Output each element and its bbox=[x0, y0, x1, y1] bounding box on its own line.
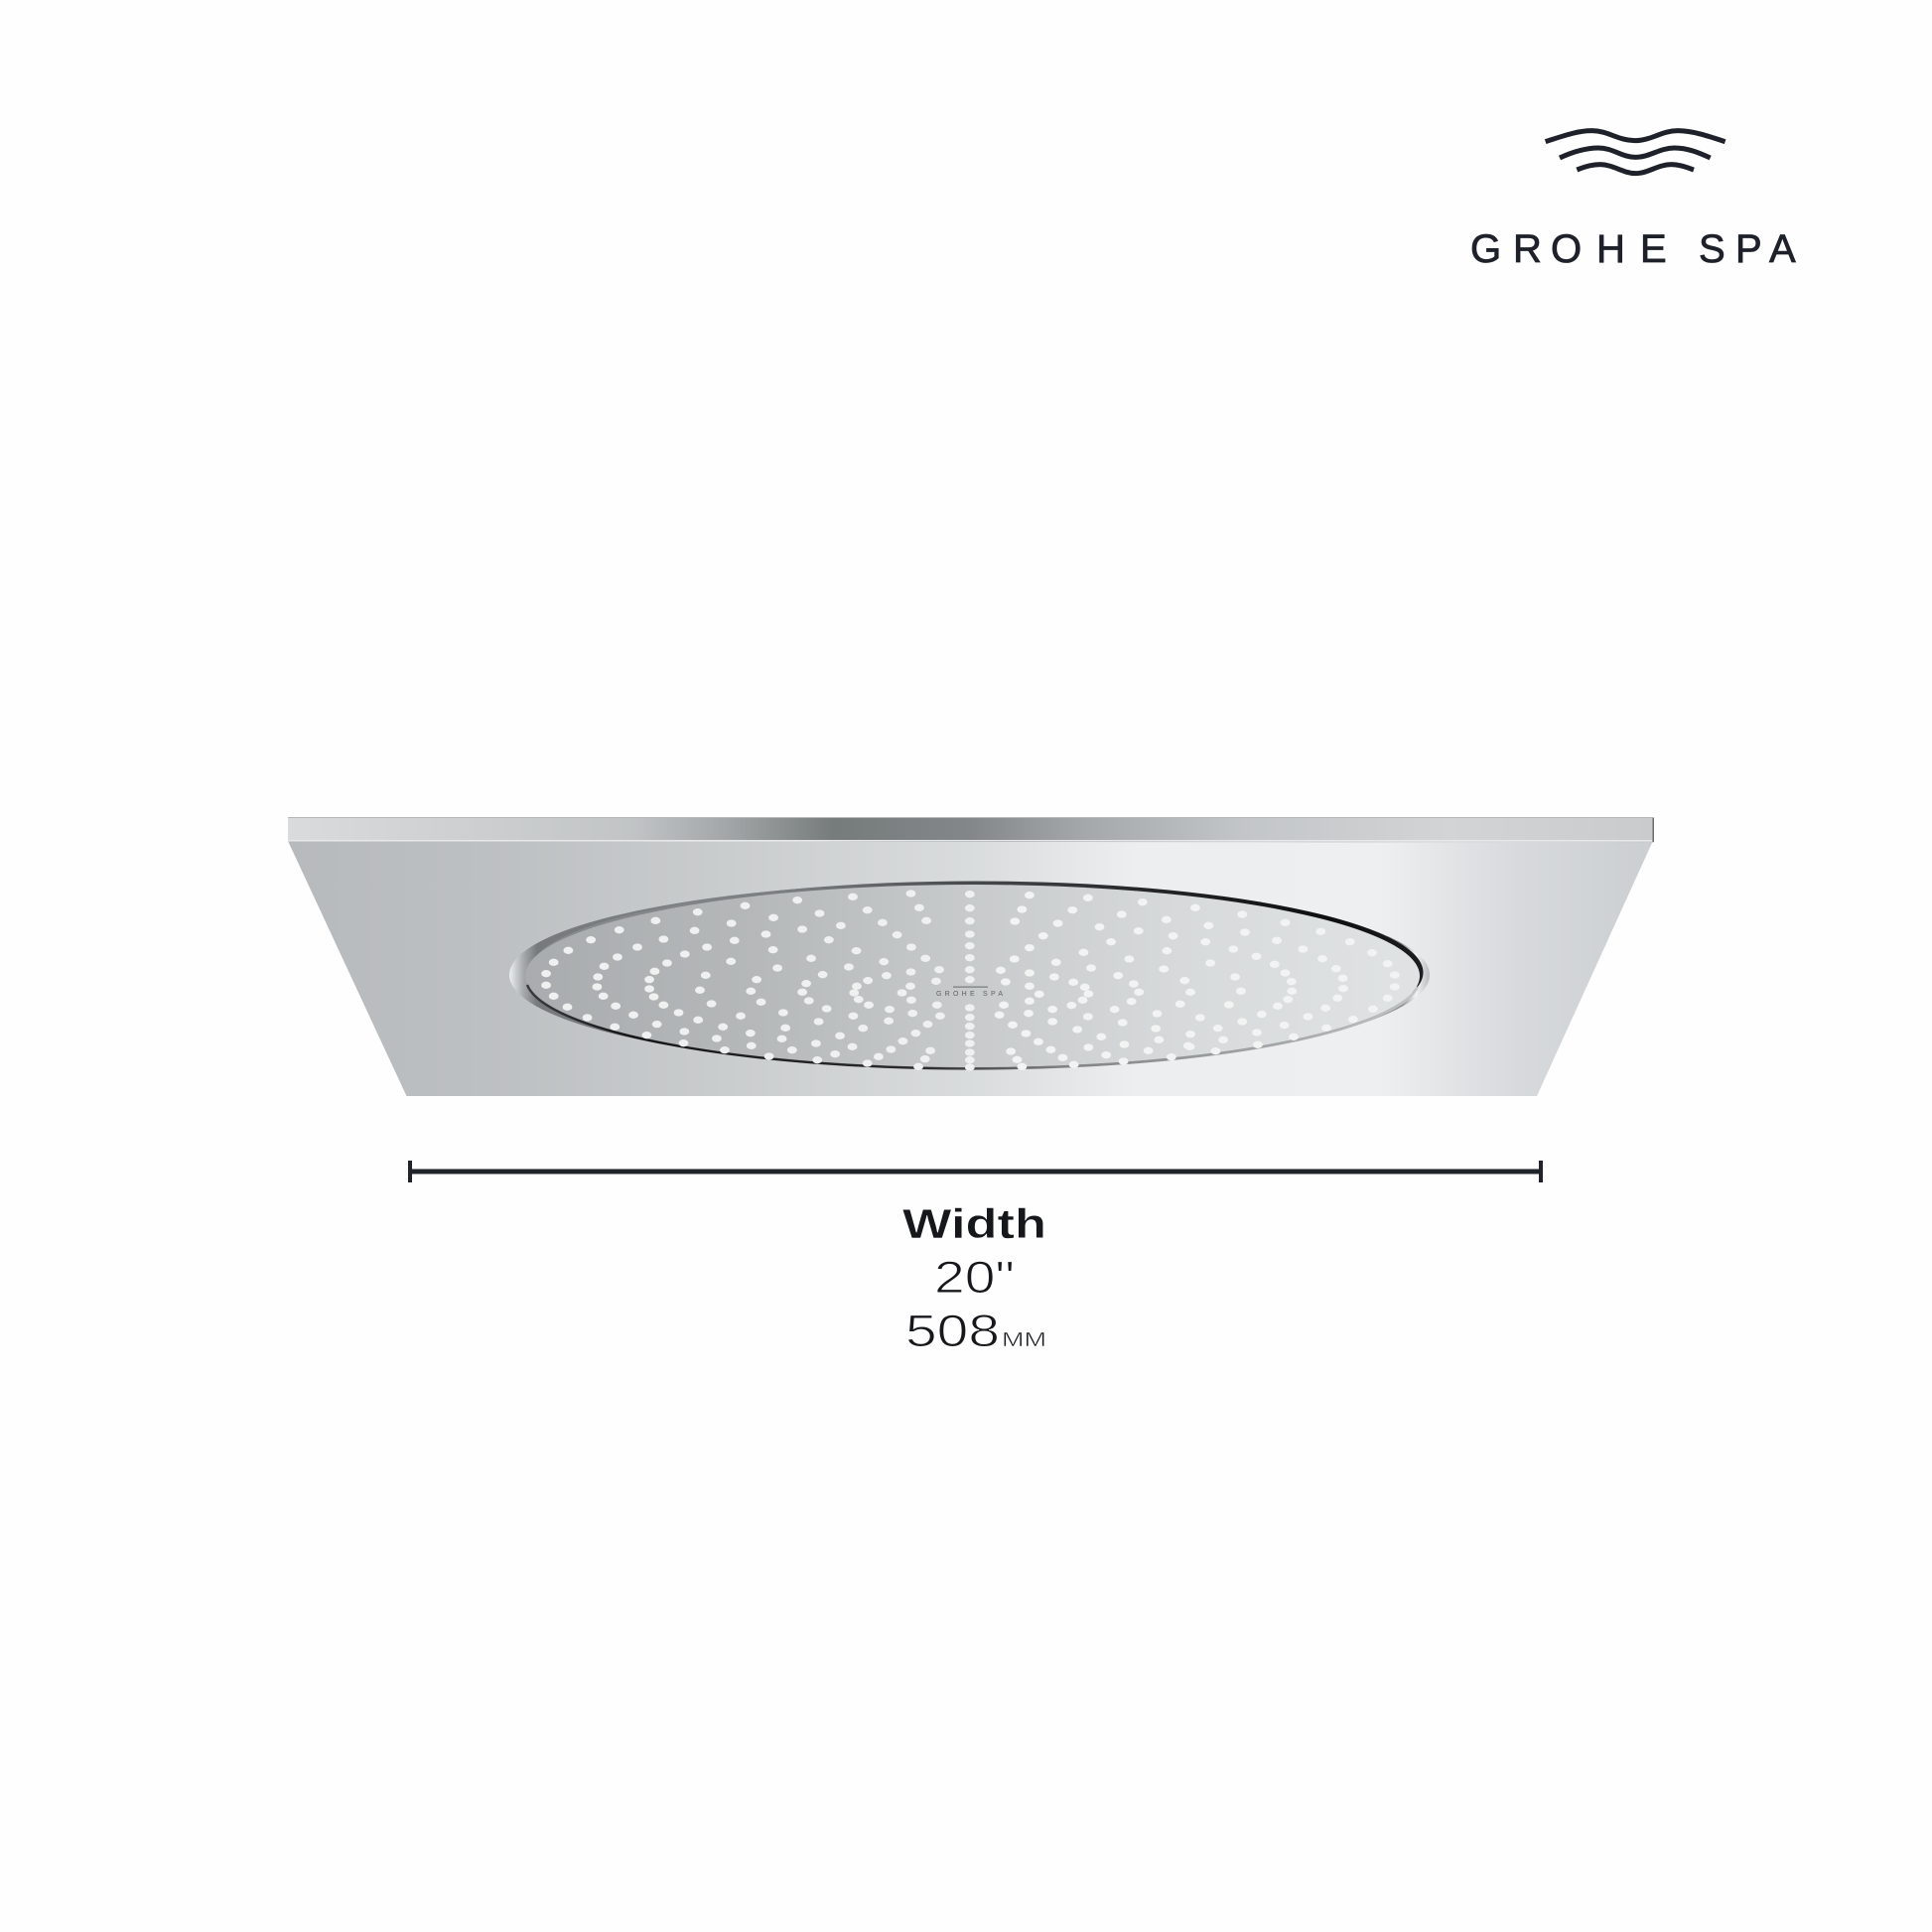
tiny brand mark on spray face bbox=[936, 987, 1003, 998]
icon: three water waves bbox=[1546, 131, 1725, 174]
value: millimetres: 508 bbox=[905, 1306, 1000, 1356]
value: inches: 20" bbox=[934, 1252, 1015, 1303]
dimension label bbox=[902, 1200, 1046, 1356]
spray nozzles left half bbox=[546, 894, 970, 1067]
tiny brand mark on spray face: GROHE SPA bbox=[936, 991, 1003, 998]
value: millimetres: MM bbox=[1002, 1329, 1046, 1351]
spray nozzles right half bbox=[1000, 896, 1395, 1066]
value: millimetres bbox=[905, 1306, 1046, 1356]
dimension line bbox=[408, 1161, 1543, 1182]
label: Width: Width bbox=[902, 1200, 1046, 1247]
shower head round spray face bbox=[509, 882, 1430, 1068]
shower head top edge bbox=[288, 817, 1654, 843]
shower head product bbox=[288, 817, 1654, 1096]
logo: GROHE SPA bbox=[1470, 131, 1796, 271]
shower head plate bbox=[288, 841, 1652, 1096]
logo wordmark: GROHE SPA bbox=[1470, 227, 1796, 271]
